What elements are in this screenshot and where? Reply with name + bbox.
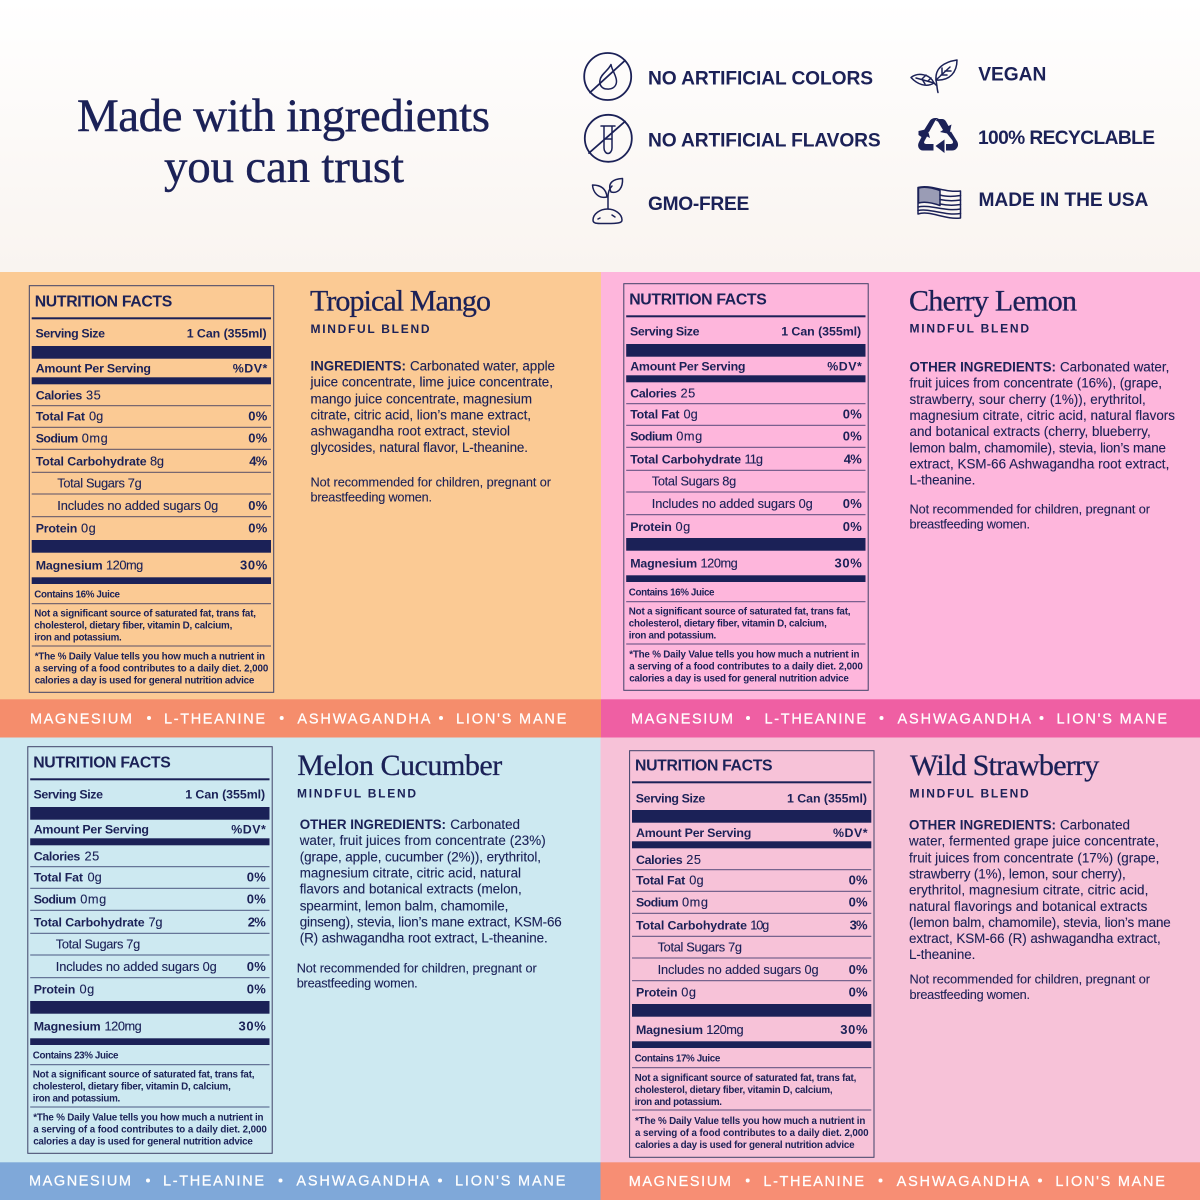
- nutrition facts table: melon cucumber: iron and potassium.: [33, 1094, 120, 1104]
- ingredients text: OTHER INGREDIENTS:: [909, 818, 1056, 833]
- nutrition facts table: cherry lemon: iron and potassium.: [629, 630, 716, 642]
- nutrition facts table: melon cucumber: Includes no added sugars 0g: [56, 959, 217, 974]
- nutrition facts table: tropical mango: Amount Per Serving: [36, 361, 151, 375]
- ingredients text: erythritol, magnesium citrate, citric acid,: [909, 882, 1148, 897]
- ingredients text: juice concentrate, lime juice concentrate,: [310, 375, 553, 390]
- nutrition facts table: tropical mango: 30%: [240, 557, 268, 572]
- nutrition facts table: tropical mango: Calories: [36, 388, 82, 402]
- ingredients text: mango juice concentrate, magnesium: [310, 391, 532, 406]
- nutrition facts table: wild strawberry: 0%: [849, 985, 868, 1000]
- nutrition facts table: tropical mango: Contains 16% Juice: [34, 589, 121, 600]
- nutrition facts table: cherry lemon: a serving of a food contributes to a daily diet. 2,000: [629, 661, 863, 672]
- nutrition facts table: cherry lemon: Serving Size: [630, 325, 700, 339]
- ingredient band: LION'S MANE: [455, 1174, 566, 1190]
- ingredient band: ASHWAGANDHA: [898, 711, 1031, 727]
- title: [77, 90, 490, 193]
- ingredient band: [0, 1162, 600, 1200]
- warning note: Not recommended for children, pregnant or: [297, 961, 537, 975]
- ingredient band: L-THEANINE: [163, 1174, 264, 1190]
- nutrition facts table: melon cucumber: 0g: [80, 982, 94, 997]
- warning note: [910, 502, 1151, 532]
- icon: no artificial colors: [584, 53, 631, 100]
- flavor heading: tropical mango: Tropical Mango: [310, 284, 491, 318]
- nutrition facts table: wild strawberry: Magnesium: [636, 1023, 703, 1037]
- warning note: breastfeeding women.: [910, 988, 1030, 1002]
- ingredient band: ASHWAGANDHA: [296, 1174, 430, 1190]
- nutrition facts table: tropical mango: %DV*: [233, 361, 267, 375]
- nutrition facts table: wild strawberry: 30%: [840, 1022, 868, 1037]
- nutrition facts table: tropical mango: 8g: [150, 454, 164, 469]
- ingredients text: citrate, citric acid, lion’s mane extract,: [310, 407, 531, 422]
- warning note: breastfeeding women.: [910, 518, 1030, 532]
- title: you can trust: [164, 141, 404, 193]
- nutrition facts table: cherry lemon: NUTRITION FACTS: [629, 292, 767, 309]
- nutrition facts table: cherry lemon: Not a significant source of saturated fat, trans fat,: [629, 606, 851, 618]
- warning note: Not recommended for children, pregnant or: [910, 972, 1151, 986]
- nutrition facts table: melon cucumber: 1 Can (355ml): [185, 788, 265, 802]
- nutrition facts table: cherry lemon: 11g: [744, 452, 763, 467]
- ingredients text: natural flavorings and botanical extracts: [909, 899, 1148, 914]
- nutrition facts table: cherry lemon: 0g: [676, 519, 690, 534]
- nutrition facts table: cherry lemon: %DV*: [827, 359, 862, 373]
- nutrition facts table: wild strawberry: Includes no added sugars 0g: [658, 962, 819, 977]
- warning note: [297, 961, 537, 991]
- ingredients text: extract, KSM-66 Ashwagandha root extract,: [910, 457, 1169, 472]
- warning note: breastfeeding women.: [310, 490, 432, 504]
- ingredient band: MAGNESIUM: [629, 1174, 731, 1190]
- nutrition facts table: tropical mango: NUTRITION FACTS: [35, 294, 172, 311]
- nutrition facts table: tropical mango: 0g: [81, 521, 96, 536]
- nutrition facts table: melon cucumber: Total Sugars 7g: [56, 936, 140, 951]
- nutrition facts table: tropical mango: Total Sugars 7g: [57, 475, 142, 490]
- ingredients text: magnesium citrate, citric acid, natural flavors: [910, 408, 1175, 423]
- nutrition facts table: melon cucumber: 25: [84, 848, 99, 863]
- ingredients text: Carbonated water, apple: [410, 359, 555, 374]
- nutrition facts table: melon cucumber: Amount Per Serving: [34, 822, 149, 836]
- nutrition facts table: melon cucumber: Sodium: [34, 893, 76, 907]
- panel: tropical mango: [0, 272, 601, 738]
- ingredients text: strawberry, sour cherry (1%)), erythritol,: [910, 392, 1146, 407]
- nutrition facts table: wild strawberry: *The % Daily Value tells you how much a nutrient in: [635, 1116, 865, 1127]
- nutrition facts table: melon cucumber: 2%: [248, 915, 266, 930]
- icon: vegan leaves: [911, 60, 957, 92]
- nutrition facts table: wild strawberry: 120mg: [706, 1022, 744, 1037]
- nutrition facts table: tropical mango: 0g: [89, 409, 103, 424]
- nutrition facts table: melon cucumber: Not a significant source of saturated fat, trans fat,: [33, 1070, 255, 1080]
- nutrition facts table: wild strawberry: NUTRITION FACTS: [635, 758, 773, 775]
- nutrition facts table: cherry lemon: 1 Can (355ml): [781, 325, 861, 339]
- nutrition facts table: tropical mango: 4%: [249, 454, 268, 469]
- ingredients text: Carbonated: [450, 817, 520, 832]
- ingredients text: spearmint, lemon balm, chamomile,: [300, 898, 508, 913]
- label: made in the usa: MADE IN THE USA: [978, 190, 1148, 211]
- ingredients text: OTHER INGREDIENTS:: [910, 359, 1056, 374]
- nutrition facts table: wild strawberry: iron and potassium.: [635, 1097, 722, 1108]
- subheading: MINDFUL BLEND: [910, 787, 1029, 801]
- nutrition facts table: melon cucumber: 120mg: [104, 1018, 142, 1033]
- ingredients text: magnesium citrate, citric acid, natural: [300, 866, 521, 881]
- flavor heading: wild strawberry: Wild Strawberry: [910, 749, 1099, 782]
- ingredients text: L-theanine.: [910, 473, 975, 488]
- ingredients text: strawberry (1%), lemon, sour cherry),: [909, 866, 1126, 881]
- ingredients text: ashwagandha root extract, steviol: [310, 423, 510, 438]
- nutrition facts table: melon cucumber: Contains 23% Juice: [33, 1050, 119, 1061]
- nutrition facts table: wild strawberry: 0%: [849, 873, 868, 888]
- ingredients text: OTHER INGREDIENTS:: [300, 817, 446, 832]
- nutrition facts table: melon cucumber: 0%: [247, 959, 266, 974]
- nutrition facts table: cherry lemon: Total Sugars 8g: [652, 473, 736, 488]
- nutrition facts table: cherry lemon: 120mg: [700, 555, 738, 570]
- nutrition facts table: melon cucumber: 0g: [88, 870, 102, 885]
- nutrition facts table: tropical mango: 35: [86, 387, 101, 402]
- ingredient band: [600, 1162, 1200, 1200]
- ingredients text: ginseng), stevia, lion’s mane extract, KSM-66: [300, 914, 562, 929]
- nutrition facts table: tropical mango: Protein: [36, 522, 77, 536]
- nutrition facts table: tropical mango: 0mg: [82, 431, 108, 446]
- label: 100% recyclable: 100% RECYCLABLE: [978, 128, 1155, 149]
- nutrition facts table: tropical mango: Magnesium: [36, 558, 103, 572]
- nutrition facts table: tropical mango: Serving Size: [36, 327, 105, 341]
- nutrition facts table: wild strawberry: 1 Can (355ml): [787, 791, 867, 805]
- ingredients text: and botanical extracts (cherry, blueberry,: [910, 424, 1151, 439]
- nutrition facts table: cherry lemon: 0%: [843, 519, 862, 534]
- ingredients text: fruit juices from concentrate (16%), (grape,: [910, 375, 1162, 390]
- ingredient band: [0, 699, 601, 738]
- nutrition facts table: cherry lemon: 0g: [684, 407, 698, 422]
- nutrition facts table: tropical mango: 120mg: [106, 557, 143, 572]
- ingredient band: L-THEANINE: [763, 1174, 864, 1190]
- nutrition facts table: melon cucumber: *The % Daily Value tells you how much a nutrient in: [33, 1112, 264, 1123]
- nutrition facts table: cherry lemon: calories a day is used for general nutrition advice: [629, 673, 849, 684]
- ingredients text: (R) ashwagandha root extract, L-theanine.: [300, 930, 548, 945]
- nutrition facts table: melon cucumber: a serving of a food contributes to a daily diet. 2,000: [33, 1124, 267, 1135]
- nutrition facts table: wild strawberry: 3%: [850, 918, 868, 933]
- nutrition facts table: melon cucumber: NUTRITION FACTS: [33, 755, 171, 772]
- subheading: MINDFUL BLEND: [910, 322, 1029, 336]
- nutrition facts table: cherry lemon: cholesterol, dietary fiber, vitamin D, calcium,: [629, 618, 827, 630]
- nutrition facts table: tropical mango: 1 Can (355ml): [187, 327, 267, 341]
- nutrition facts table: melon cucumber: Total Fat: [34, 871, 83, 885]
- nutrition facts table: tropical mango: Total Fat: [36, 410, 85, 424]
- nutrition facts table: wild strawberry: %DV*: [833, 826, 868, 840]
- nutrition facts table: melon cucumber: 0mg: [80, 892, 106, 907]
- ingredients text: flavors and botanical extracts (melon,: [300, 882, 522, 897]
- ingredients text: extract, KSM-66 (R) ashwagandha extract,: [909, 931, 1161, 946]
- nutrition facts table: cherry lemon: Includes no added sugars 0g: [652, 496, 813, 511]
- warning note: breastfeeding women.: [297, 977, 418, 991]
- ingredients text: Carbonated water,: [1060, 359, 1169, 374]
- ingredient band: ASHWAGANDHA: [297, 711, 431, 727]
- ingredients text: water, fruit juices from concentrate (23%): [299, 833, 546, 848]
- ingredient band: L-THEANINE: [164, 711, 265, 727]
- nutrition facts table: wild strawberry: Serving Size: [636, 791, 705, 805]
- nutrition facts table: wild strawberry: Calories: [636, 853, 683, 867]
- nutrition facts table: melon cucumber: 30%: [238, 1018, 266, 1033]
- nutrition facts table: tropical mango: 0%: [248, 521, 268, 536]
- nutrition facts table: tropical mango: calories a day is used for general nutrition advice: [35, 675, 255, 686]
- nutrition facts table: cherry lemon: *The % Daily Value tells you how much a nutrient in: [629, 649, 860, 660]
- label: no artificial flavors: NO ARTIFICIAL FLAVORS: [648, 131, 881, 152]
- subheading: MINDFUL BLEND: [297, 787, 416, 801]
- nutrition facts table: melon cucumber: 7g: [148, 915, 162, 930]
- nutrition facts table: wild strawberry: 0%: [849, 962, 868, 977]
- nutrition facts table: cherry lemon: 0%: [843, 429, 862, 444]
- nutrition facts table: tropical mango: Includes no added sugars 0g: [57, 498, 218, 513]
- nutrition facts table: tropical mango: 0%: [248, 409, 268, 424]
- ingredients text: water, fermented grape juice concentrate,: [908, 834, 1159, 849]
- nutrition facts table: wild strawberry: Total Sugars 7g: [658, 939, 742, 954]
- ingredient band: [601, 699, 1200, 738]
- nutrition facts table: melon cucumber: Calories: [34, 849, 80, 863]
- ingredients text: L-theanine.: [909, 947, 975, 962]
- icon: recycle: [918, 118, 958, 153]
- nutrition facts table: cherry lemon: Amount Per Serving: [630, 359, 746, 373]
- flavor heading: cherry lemon: Cherry Lemon: [909, 284, 1077, 318]
- nutrition facts table: melon cucumber: 0%: [247, 892, 266, 907]
- nutrition facts table: wild strawberry: Sodium: [636, 896, 679, 910]
- nutrition facts table: wild strawberry: 0%: [849, 895, 868, 910]
- nutrition facts table: cherry lemon: 0%: [843, 407, 862, 422]
- panel: melon cucumber: [0, 738, 600, 1200]
- nutrition facts table: cherry lemon: Magnesium: [630, 556, 697, 570]
- nutrition facts table: tropical mango: Not a significant source of saturated fat, trans fat,: [34, 608, 256, 620]
- nutrition facts table: cherry lemon: [624, 284, 868, 690]
- nutrition facts table: wild strawberry: 0g: [689, 873, 704, 888]
- ingredient band: ASHWAGANDHA: [897, 1174, 1030, 1190]
- nutrition facts table: cherry lemon: Protein: [630, 520, 672, 534]
- nutrition facts table: melon cucumber: 0%: [247, 982, 266, 997]
- nutrition facts table: cherry lemon: 4%: [844, 452, 862, 467]
- nutrition facts table: wild strawberry: cholesterol, dietary fiber, vitamin D, calcium,: [635, 1085, 833, 1096]
- nutrition facts table: wild strawberry: a serving of a food contributes to a daily diet. 2,000: [635, 1128, 869, 1139]
- nutrition facts table: cherry lemon: 25: [680, 385, 695, 400]
- nutrition facts table: melon cucumber: Total Carbohydrate: [34, 916, 145, 930]
- nutrition facts table: tropical mango: *The % Daily Value tells you how much a nutrient in: [35, 651, 265, 662]
- nutrition facts table: cherry lemon: Calories: [630, 386, 677, 400]
- label: gmo-free: GMO-FREE: [648, 194, 749, 215]
- nutrition facts table: cherry lemon: Total Carbohydrate: [630, 453, 741, 467]
- nutrition facts table: melon cucumber: [28, 747, 272, 1153]
- flavor heading: melon cucumber: Melon Cucumber: [297, 749, 502, 782]
- nutrition facts table: wild strawberry: Contains 17% Juice: [635, 1054, 721, 1065]
- title: Made with ingredients: [77, 90, 490, 142]
- nutrition facts table: tropical mango: a serving of a food contributes to a daily diet. 2,000: [35, 663, 269, 674]
- warning note: Not recommended for children, pregnant or: [310, 476, 552, 490]
- nutrition facts table: melon cucumber: Serving Size: [34, 788, 103, 802]
- nutrition facts table: wild strawberry: 0g: [681, 985, 696, 1000]
- nutrition facts table: wild strawberry: Protein: [636, 986, 678, 1000]
- nutrition facts table: melon cucumber: cholesterol, dietary fiber, vitamin D, calcium,: [33, 1082, 231, 1092]
- ingredients text: [310, 359, 555, 455]
- nutrition facts table: cherry lemon: Total Fat: [630, 408, 680, 422]
- ingredient band: MAGNESIUM: [631, 711, 733, 727]
- nutrition facts table: melon cucumber: %DV*: [231, 822, 266, 836]
- ingredients text: INGREDIENTS:: [310, 359, 406, 374]
- nutrition facts table: tropical mango: 0%: [248, 498, 268, 513]
- nutrition facts table: cherry lemon: 0%: [843, 496, 862, 511]
- nutrition facts table: tropical mango: Sodium: [36, 432, 78, 446]
- ingredients text: (grape, apple, cucumber (2%)), erythritol,: [300, 850, 541, 865]
- icon: sprout: [592, 178, 623, 224]
- nutrition facts table: tropical mango: [29, 286, 274, 692]
- ingredient band: LION'S MANE: [1056, 711, 1167, 727]
- ingredients text: fruit juices from concentrate (17%) (grape,: [909, 850, 1159, 865]
- nutrition facts table: melon cucumber: calories a day is used for general nutrition advice: [33, 1136, 253, 1147]
- ingredients text: lemon balm, chamomile), stevia, lion’s mane: [910, 441, 1166, 456]
- nutrition facts table: melon cucumber: Protein: [34, 983, 75, 997]
- subheading: MINDFUL BLEND: [310, 322, 430, 336]
- panel: wild strawberry: [600, 738, 1200, 1200]
- nutrition facts table: wild strawberry: [630, 751, 874, 1157]
- warning note: [310, 476, 552, 504]
- ingredient band: MAGNESIUM: [30, 711, 132, 727]
- ingredient band: L-THEANINE: [764, 711, 866, 727]
- nutrition facts table: wild strawberry: calories a day is used for general nutrition advice: [635, 1140, 855, 1151]
- nutrition facts table: tropical mango: 0%: [248, 431, 268, 446]
- nutrition facts table: wild strawberry: 10g: [750, 918, 769, 933]
- label: no artificial colors: NO ARTIFICIAL COLORS: [648, 68, 873, 89]
- nutrition facts table: tropical mango: iron and potassium.: [34, 632, 122, 644]
- ingredients text: [910, 359, 1175, 488]
- nutrition facts table: wild strawberry: 25: [686, 852, 701, 867]
- icon: usa flag: [918, 187, 960, 218]
- nutrition facts table: wild strawberry: Not a significant source of saturated fat, trans fat,: [635, 1073, 857, 1084]
- icon: no artificial flavors: [585, 115, 632, 162]
- ingredients text: [908, 818, 1171, 962]
- nutrition facts table: melon cucumber: Magnesium: [34, 1019, 101, 1033]
- nutrition facts table: tropical mango: cholesterol, dietary fiber, vitamin D, calcium,: [34, 620, 233, 632]
- ingredients text: Carbonated: [1060, 818, 1130, 833]
- ingredients text: [299, 817, 562, 945]
- ingredients text: glycosides, natural flavor, L-theanine.: [310, 440, 528, 455]
- nutrition facts table: cherry lemon: Contains 16% Juice: [629, 587, 715, 598]
- ingredient band: LION'S MANE: [1055, 1174, 1165, 1190]
- nutrition facts table: wild strawberry: 0mg: [682, 895, 708, 910]
- nutrition facts table: melon cucumber: 0%: [247, 870, 266, 885]
- header section: [0, 0, 1200, 272]
- nutrition facts table: wild strawberry: Total Fat: [636, 874, 685, 888]
- nutrition facts table: cherry lemon: 0mg: [676, 429, 702, 444]
- nutrition facts table: cherry lemon: Sodium: [630, 430, 673, 444]
- warning note: Not recommended for children, pregnant or: [910, 502, 1151, 516]
- nutrition facts table: wild strawberry: Amount Per Serving: [636, 826, 751, 840]
- ingredients text: (lemon balm, chamomile), stevia, lion’s mane: [909, 915, 1171, 930]
- nutrition facts table: tropical mango: Total Carbohydrate: [36, 455, 147, 469]
- warning note: [910, 972, 1151, 1002]
- nutrition facts table: wild strawberry: Total Carbohydrate: [636, 919, 747, 933]
- ingredient band: LION'S MANE: [456, 711, 567, 727]
- nutrition facts table: cherry lemon: 30%: [834, 555, 862, 570]
- ingredient band: MAGNESIUM: [29, 1174, 131, 1190]
- panel: cherry lemon: [601, 272, 1200, 738]
- label: vegan: VEGAN: [978, 65, 1046, 86]
